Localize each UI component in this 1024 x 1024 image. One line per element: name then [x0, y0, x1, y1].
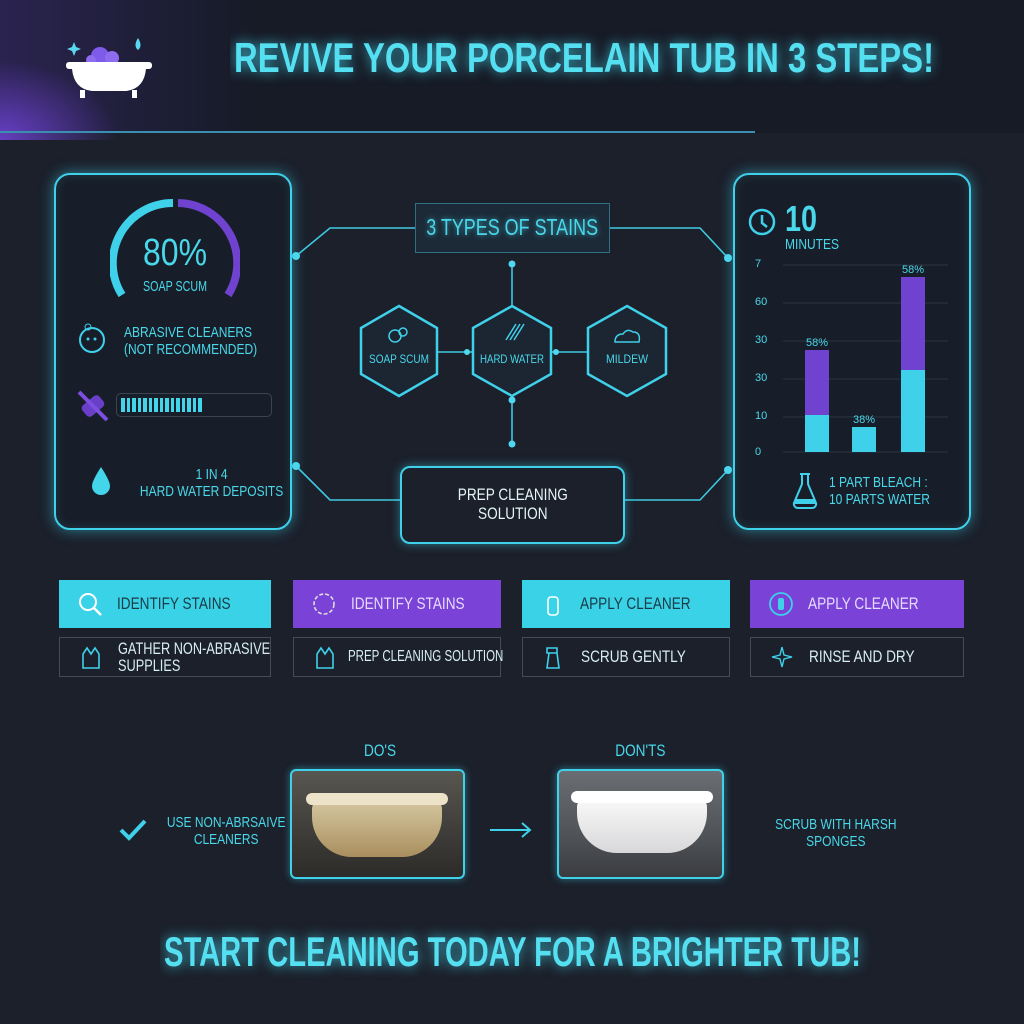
bleach ratio: 10 PARTS WATER [829, 490, 930, 508]
abrasive cleaners note [79, 324, 257, 358]
hexagons: stain types [360, 304, 668, 398]
do: use non-abrasive [120, 814, 286, 848]
panel: prep cleaning solution: PREP CLEANING [457, 485, 568, 504]
heading: 3 types of stains [415, 203, 610, 253]
photo: stained tub [290, 769, 465, 879]
do: use non-abrasive: CLEANERS [194, 830, 259, 848]
step 2: IDENTIFY STAINS [351, 594, 465, 613]
heading: 3 types of stains: 3 TYPES OF STAINS [427, 214, 598, 240]
steps grid: RINSE AND DRY [809, 647, 915, 666]
do: use non-abrasive: USE NON-ABRSAIVE [167, 814, 286, 831]
hard water stat: 1 IN 4 [196, 466, 228, 483]
bar chart [755, 258, 948, 458]
don'ts label: DON'TS [615, 741, 665, 760]
arrow [490, 822, 532, 838]
step 1 [59, 580, 271, 628]
icon: bathtub [66, 38, 152, 98]
steps grid: PREP CLEANING SOLUTION [348, 648, 503, 665]
step 3 [522, 580, 730, 628]
bar chart: 60 [755, 296, 767, 308]
steps grid: SUPPLIES [118, 656, 180, 675]
steps grid: SCRUB GENTLY [581, 647, 686, 666]
timer 10 minutes [748, 198, 839, 253]
bar chart: 10 [755, 410, 767, 422]
photo: clean tub [557, 769, 724, 879]
panel: right chart [733, 173, 971, 530]
don't: scrub with harsh sponges: SPONGES [806, 832, 866, 850]
hexagons: stain types: HARD WATER [480, 352, 544, 366]
step 3: APPLY CLEANER [580, 594, 691, 613]
gauge 80% soap scum: 80% [143, 232, 207, 274]
bar chart: 58% [806, 337, 828, 349]
bleach ratio: 1 PART BLEACH : [829, 474, 928, 491]
panel: left stats [54, 173, 292, 530]
bar chart: 38% [853, 414, 875, 426]
steps grid: GATHER NON-ABRASIVE [118, 639, 270, 658]
panel: prep cleaning solution [400, 466, 625, 544]
bar chart: 7 [755, 258, 761, 270]
connector lines [292, 227, 732, 501]
timer 10 minutes: MINUTES [785, 236, 839, 253]
don't: scrub with harsh sponges: SCRUB WITH HARSH [775, 816, 897, 833]
step 4: APPLY CLEANER [808, 594, 919, 613]
hard water stat: HARD WATER DEPOSITS [140, 482, 283, 500]
gauge 80% soap scum [110, 199, 240, 298]
abrasive cleaners note: ABRASIVE CLEANERS [124, 324, 252, 341]
hexagons: stain types: MILDEW [606, 352, 649, 366]
bleach ratio [792, 473, 930, 509]
bar chart: 30 [755, 334, 767, 346]
header band [0, 0, 1024, 133]
bar chart: 58% [902, 264, 924, 276]
step 1: IDENTIFY STAINS [117, 594, 231, 613]
abrasive cleaners note: (NOT RECOMMENDED) [124, 340, 257, 358]
don't: scrub with harsh sponges [775, 816, 897, 850]
hard water stat [92, 466, 283, 500]
progress bar with sponge icon [78, 390, 272, 422]
step 4 [750, 580, 964, 628]
bar chart: 30 [755, 372, 767, 384]
steps grid [59, 580, 964, 677]
timer 10 minutes: 10 [785, 198, 817, 239]
do's label: DO'S [364, 741, 396, 760]
gauge 80% soap scum: SOAP SCUM [143, 278, 207, 295]
step 2 [293, 580, 501, 628]
hexagons: stain types: SOAP SCUM [369, 352, 429, 366]
panel: prep cleaning solution: SOLUTION [478, 504, 547, 523]
bar chart: 0 [755, 446, 761, 458]
